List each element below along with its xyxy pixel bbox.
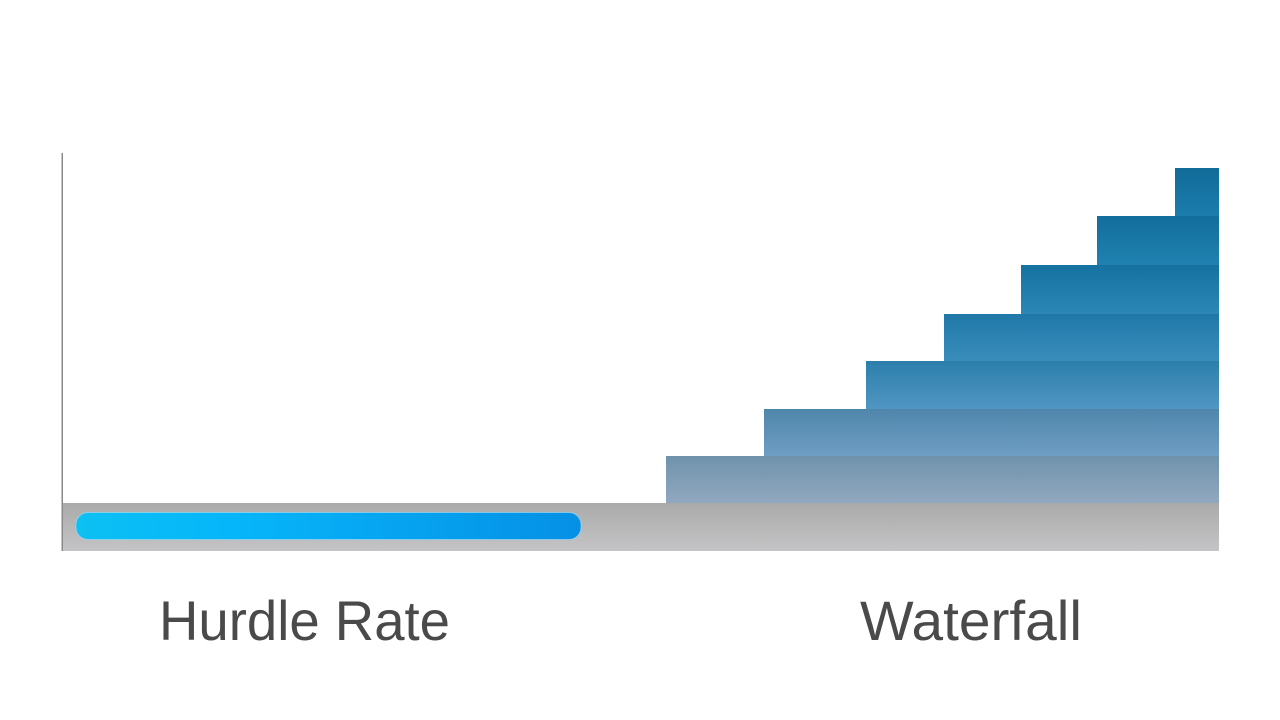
step 7 (1175, 168, 1219, 216)
step 1 (666, 456, 1219, 503)
step 2 (764, 409, 1219, 456)
baseline band (62, 503, 1219, 551)
label: hurdle rate: Hurdle Rate (159, 589, 450, 652)
step 5 (1021, 265, 1219, 314)
waterfall staircase (666, 168, 1219, 503)
vertical axis (62, 153, 63, 551)
step 3 (866, 361, 1219, 409)
hurdle rate bar (76, 512, 581, 540)
step 6 (1097, 216, 1219, 265)
label: waterfall: Waterfall (860, 589, 1082, 652)
step 4 (944, 314, 1219, 361)
